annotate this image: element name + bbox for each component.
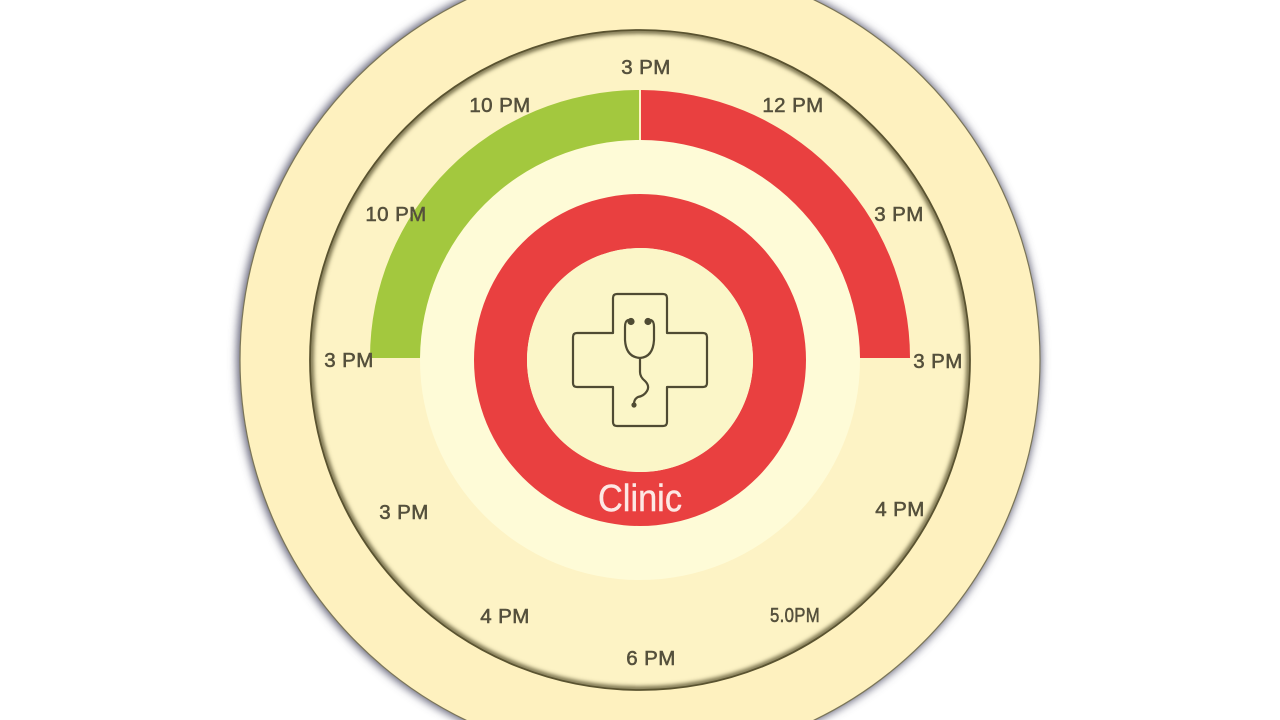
clinic label: Clinic: [598, 478, 682, 520]
pale inner disc: [420, 140, 860, 580]
hour labels: 6 PM: [626, 647, 676, 670]
hour labels: 3 PM: [913, 350, 963, 373]
icon: medical cross with stethoscope: [573, 294, 707, 426]
centre disc: [527, 248, 753, 472]
hour labels: 5.0PM: [770, 604, 820, 627]
green morning arc: [370, 90, 639, 358]
stethoscope: [625, 319, 654, 406]
hour labels: 3 PM: [324, 349, 374, 372]
hour labels: 3 PM: [379, 501, 429, 524]
hour labels: 4 PM: [875, 498, 925, 521]
cross outline: [573, 294, 707, 426]
hour labels: 10 PM: [365, 203, 427, 226]
hour labels: 4 PM: [480, 605, 530, 628]
hour labels: [324, 56, 963, 670]
hour labels: 3 PM: [874, 203, 924, 226]
red afternoon arc: [641, 90, 910, 358]
red clinic ring: [474, 194, 806, 526]
inner clock face: [310, 30, 970, 690]
outer dial ring: [237, 0, 1041, 720]
hour labels: 3 PM: [621, 56, 671, 79]
hour labels: 10 PM: [469, 94, 531, 117]
hour labels: 12 PM: [762, 94, 824, 117]
